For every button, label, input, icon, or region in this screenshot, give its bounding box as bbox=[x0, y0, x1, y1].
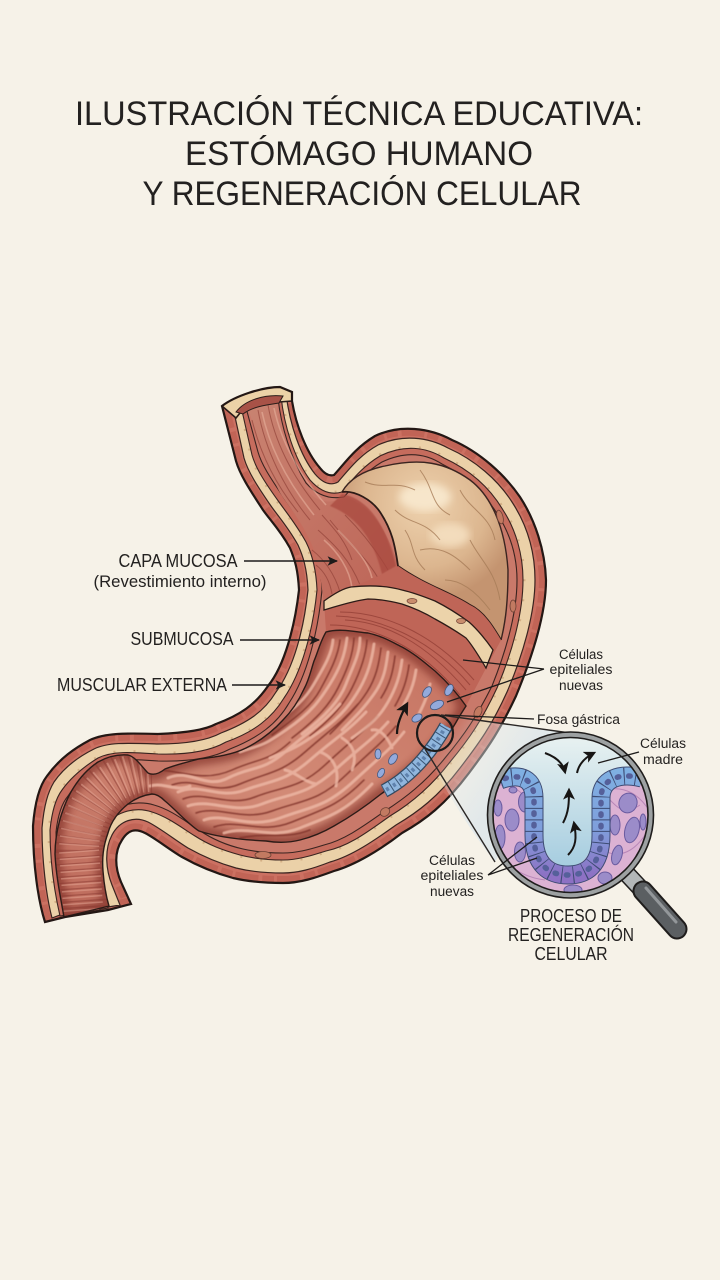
submucosa layer bbox=[42, 394, 535, 918]
label: muscular externa: MUSCULAR EXTERNA bbox=[57, 674, 228, 695]
label: células epiteliales nuevas (lower): nuevas bbox=[430, 884, 474, 899]
label: células madre bbox=[640, 736, 686, 767]
migrating cells bbox=[375, 683, 455, 779]
outer outline bbox=[33, 387, 546, 922]
label: células epiteliales nuevas (upper): Células bbox=[559, 647, 603, 662]
label: células epiteliales nuevas (lower): epiteliales bbox=[420, 868, 484, 883]
label: células madre: madre bbox=[643, 752, 683, 767]
epithelial cell row bbox=[384, 726, 446, 791]
fundus inner surface bbox=[342, 462, 508, 640]
magnifier projection cone bbox=[425, 716, 570, 862]
lower mucosa with folds bbox=[55, 630, 466, 920]
duodenum striations bbox=[79, 772, 152, 920]
label: células epiteliales nuevas (lower) bbox=[420, 853, 484, 899]
magnifier handle bbox=[627, 874, 677, 929]
leader lines: lower células epiteliales bbox=[488, 837, 537, 875]
lumen flow arrows bbox=[545, 753, 594, 855]
title: Y REGENERACIÓN CELULAR bbox=[142, 175, 582, 213]
label: células epiteliales nuevas (lower): Células bbox=[429, 853, 475, 868]
edge shadow bbox=[55, 630, 466, 917]
label: submucosa: SUBMUCOSA bbox=[130, 628, 234, 649]
magnifier bbox=[488, 732, 677, 929]
vessels in wall bbox=[255, 509, 516, 858]
dark fold lines bbox=[160, 638, 409, 838]
stroma nuclei bbox=[494, 787, 646, 895]
light fold lines bbox=[150, 638, 430, 833]
stomach illustration bbox=[33, 387, 546, 922]
stroma swirls bbox=[500, 785, 650, 880]
leader line: fosa gástrica bbox=[445, 715, 534, 719]
arrow: cell migration bbox=[397, 704, 407, 734]
lens contents bbox=[490, 735, 650, 895]
label: proceso de regeneración celular: PROCESO DE bbox=[520, 906, 622, 926]
title: ESTÓMAGO HUMANO bbox=[185, 135, 533, 173]
label: proceso de regeneración celular: CELULAR bbox=[534, 944, 608, 964]
leader line: células madre bbox=[598, 752, 639, 763]
mucosa base bbox=[56, 398, 517, 915]
label: células madre: Células bbox=[640, 736, 686, 751]
label: proceso de regeneración celular: REGENERACIÓN bbox=[508, 924, 634, 945]
arrow: submucosa bbox=[240, 639, 319, 641]
opened wall strip bbox=[324, 566, 501, 706]
label: fosa gástrica: Fosa gástrica bbox=[537, 712, 620, 727]
label: capa mucosa: CAPA MUCOSA bbox=[118, 550, 238, 571]
arrow: muscular externa bbox=[232, 684, 285, 686]
magnifier lens bbox=[490, 735, 650, 895]
lens ring bbox=[490, 735, 650, 895]
projection lines bbox=[425, 715, 570, 862]
epithelial U-shaped cell layer bbox=[500, 768, 642, 875]
cut submucosa strip bbox=[324, 586, 493, 668]
lens outlines bbox=[488, 732, 654, 898]
label: células epiteliales nuevas (upper) bbox=[550, 647, 613, 693]
pit lumen bbox=[510, 738, 630, 866]
label: capa mucosa: (Revestimiento interno) bbox=[94, 572, 266, 591]
title bbox=[75, 95, 643, 213]
title: ILUSTRACIÓN TÉCNICA EDUCATIVA: bbox=[75, 95, 643, 133]
inner lining band bbox=[50, 396, 523, 916]
muscular externa layer bbox=[33, 387, 546, 922]
arrow: capa mucosa bbox=[244, 560, 337, 562]
label: células epiteliales nuevas (upper): epiteliales bbox=[550, 662, 613, 677]
infographic canvas bbox=[32, 95, 688, 960]
oesophagus rim bbox=[222, 387, 292, 418]
label: capa mucosa bbox=[94, 550, 266, 591]
label: células epiteliales nuevas (upper): nuevas bbox=[559, 678, 603, 693]
oesophagus and upper mucosa bbox=[248, 402, 432, 604]
label: proceso de regeneración celular bbox=[508, 906, 634, 964]
leader lines: upper células epiteliales bbox=[447, 660, 544, 702]
magnifier focus circle bbox=[417, 715, 453, 751]
